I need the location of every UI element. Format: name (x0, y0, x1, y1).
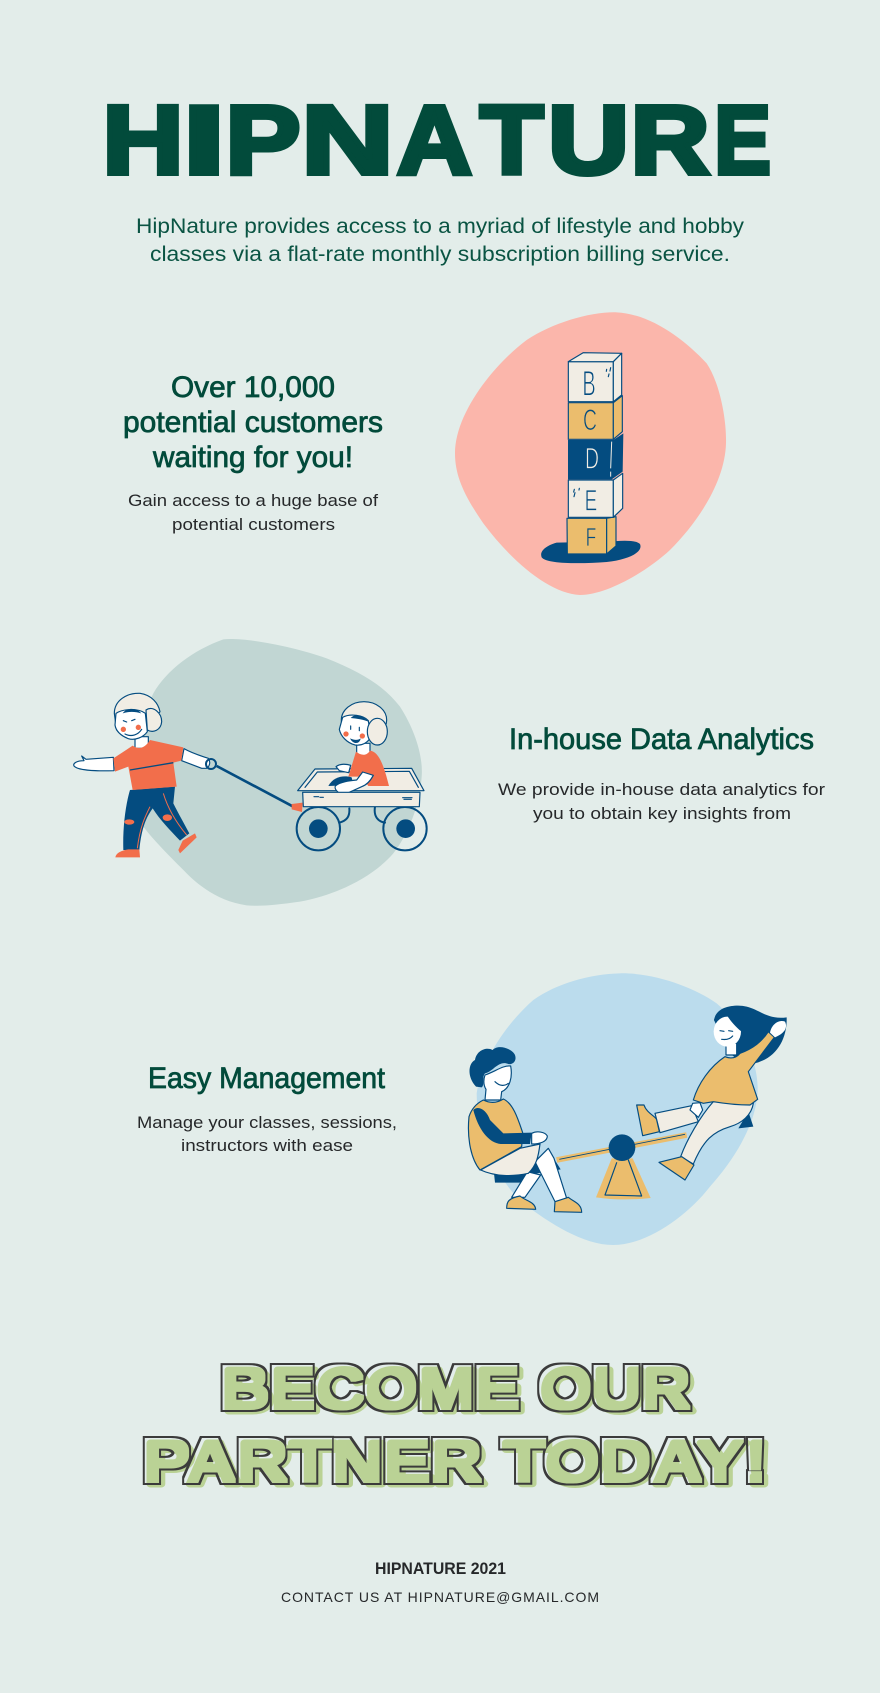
title: I (183, 86, 225, 194)
call to action outline (142, 1355, 767, 1494)
block F (567, 517, 616, 554)
call to action shadow fill (146, 1358, 771, 1497)
title: H (102, 86, 184, 194)
subtitle: classes via a flat-rate monthly subscription billing service. (150, 242, 730, 266)
title: P (226, 86, 300, 194)
footer: HIPNATURE 2021 (375, 1560, 506, 1578)
heading: over 10,000 customers: potential customers (123, 406, 383, 439)
block C: C (583, 404, 597, 437)
title: E (714, 86, 771, 194)
seesaw pivot (609, 1134, 635, 1161)
block D (568, 433, 623, 479)
illustration: boys with wagon (74, 639, 427, 906)
text block: analytics description (498, 780, 825, 823)
call to action (142, 1355, 771, 1497)
subtitle (136, 214, 744, 266)
block F: F (586, 522, 596, 552)
heading: over 10,000 customers (123, 371, 383, 474)
wagon tray (298, 768, 424, 791)
wagon hitch (292, 803, 303, 812)
wagon wheels (297, 807, 427, 850)
call to action outline: BECOME OUR (220, 1355, 690, 1421)
illustration: children on seesaw (468, 973, 787, 1245)
boy pulling (74, 693, 216, 857)
block B: B (582, 365, 596, 404)
heading: over 10,000 customers: Over 10,000 (171, 371, 335, 404)
panel: potential customers (123, 312, 726, 595)
heading: over 10,000 customers: waiting for you! (152, 441, 353, 474)
seesaw plank (557, 1135, 687, 1160)
heading: easy management: Easy Management (148, 1062, 385, 1095)
boy on seesaw (468, 1047, 582, 1212)
call to action shadow fill: PARTNER TODAY! (146, 1431, 771, 1497)
heading: in-house data analytics: In-house Data Analytics (509, 723, 814, 756)
blob: sage (133, 639, 422, 906)
panel: in-house data analytics (74, 639, 825, 906)
title: R (631, 86, 710, 194)
seesaw base (596, 1158, 651, 1199)
wagon handle (217, 766, 293, 807)
footer (281, 1560, 599, 1605)
block C (568, 396, 622, 439)
shadow (541, 541, 641, 563)
block B (568, 353, 622, 404)
title: N (302, 86, 394, 194)
text block: customers description: potential customers (172, 515, 335, 534)
call to action outline: PARTNER TODAY! (142, 1428, 767, 1494)
footer: CONTACT US AT HIPNATURE@GMAIL.COM (281, 1589, 599, 1605)
block D: D (585, 442, 599, 475)
illustration: alphabet blocks on pink blob (455, 312, 726, 595)
boy in wagon (328, 702, 389, 795)
text block: management description: instructors with ease (181, 1136, 353, 1155)
text block: analytics description: We provide in-house data analytics for (498, 780, 825, 799)
title: T (480, 86, 543, 194)
wagon body (303, 792, 420, 807)
text block: management description: Manage your classes, sessions, (137, 1113, 397, 1132)
girl on seesaw (637, 1006, 787, 1180)
block E: E (585, 485, 597, 518)
title: U (548, 86, 629, 194)
block E (568, 473, 623, 518)
blob: pink (455, 312, 726, 595)
title: A (397, 86, 472, 194)
text block: customers description: Gain access to a huge base of (128, 491, 378, 510)
text block: customers description (128, 491, 378, 534)
call to action shadow fill: BECOME OUR (224, 1358, 694, 1424)
text block: management description (137, 1113, 397, 1155)
text block: analytics description: you to obtain key insights from (533, 804, 791, 823)
subtitle: HipNature provides access to a myriad of lifestyle and hobby (136, 214, 744, 238)
panel: easy management (137, 973, 787, 1245)
blob: blue (477, 973, 758, 1245)
